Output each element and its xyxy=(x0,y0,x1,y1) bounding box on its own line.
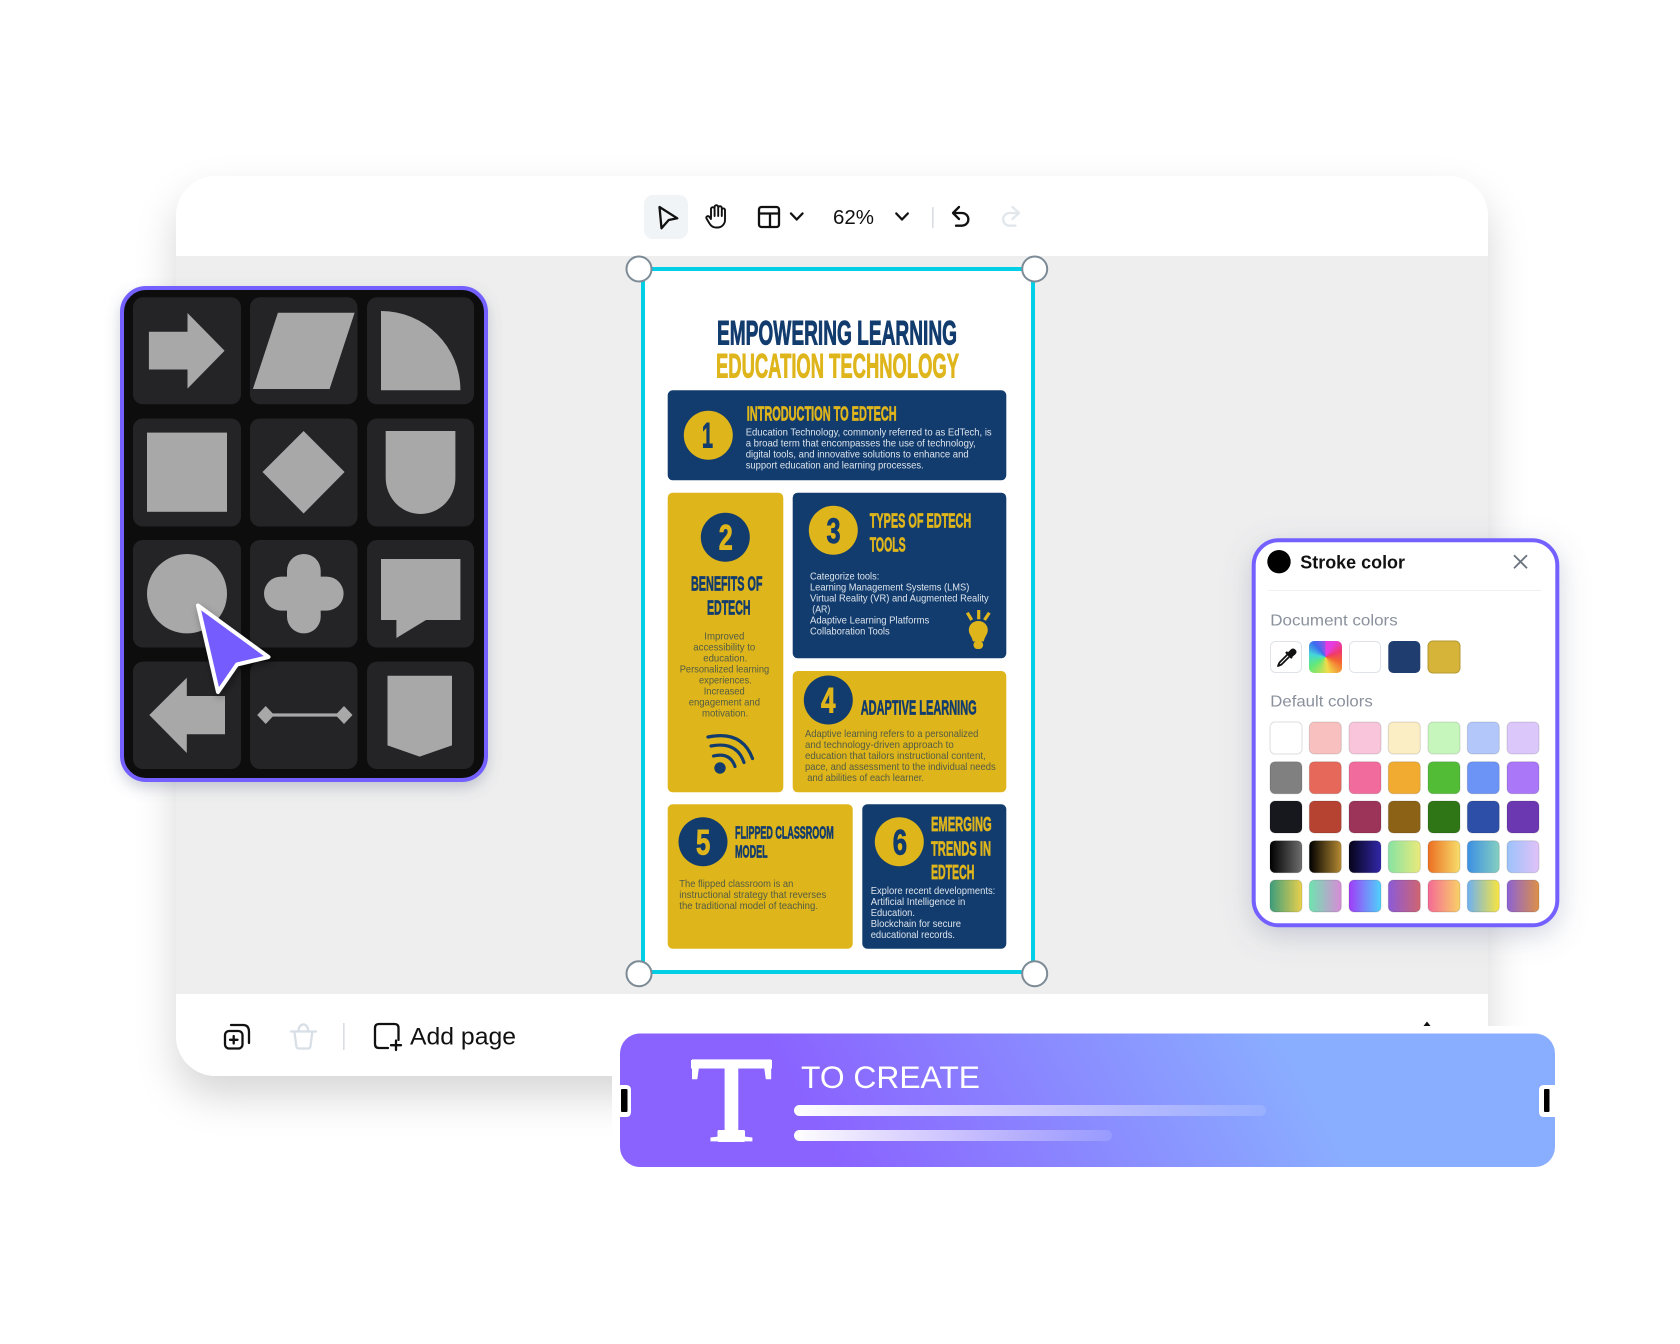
panel 2: benefits of edtech: BENEFITS OF xyxy=(691,573,762,596)
canvas area xyxy=(176,256,1488,994)
panel 6: emerging trends in edtech: Artificial Intelligence in xyxy=(871,897,965,908)
panel 5: flipped classroom model: The flipped classroom is an xyxy=(679,879,793,890)
panel 1: introduction to edtech: INTRODUCTION TO EDTECH xyxy=(747,402,897,425)
shape: speech bubble xyxy=(381,559,460,638)
panel 5: flipped classroom model: instructional strategy that reverses xyxy=(679,890,826,901)
panel 3: types of edtech tools: 3 xyxy=(826,511,840,551)
default color swatches xyxy=(1270,722,1539,912)
shape: square xyxy=(147,433,227,512)
panel 4: adaptive learning: pace, and assessment to the individual needs xyxy=(805,762,996,773)
panel 4: adaptive learning: ADAPTIVE LEARNING xyxy=(861,697,977,720)
panel 6: emerging trends in edtech: EMERGING xyxy=(931,813,992,836)
icon: hand tool xyxy=(706,205,725,228)
shape: left arrow xyxy=(149,678,225,753)
icon: select tool xyxy=(644,195,688,239)
document color swatches xyxy=(1270,641,1460,673)
panel 6: emerging trends in edtech: TRENDS IN xyxy=(931,837,991,860)
shape: circle xyxy=(147,554,227,633)
infographic page with selection frame xyxy=(626,256,1047,986)
panel 4: adaptive learning: and technology-driven approach to xyxy=(805,740,954,751)
icon: eyedropper xyxy=(1270,642,1302,672)
icon: purple cursor arrow xyxy=(198,606,268,692)
panel 6: emerging trends in edtech: Education. xyxy=(871,908,915,919)
panel 4: adaptive learning: Adaptive learning refers to a personalized xyxy=(805,729,978,740)
panel 2: benefits of edtech: EDTECH xyxy=(707,596,750,619)
banner: to create text tool xyxy=(620,1031,1555,1168)
panel 3: types of edtech tools: (AR) xyxy=(812,604,830,616)
button: add page: Add page xyxy=(410,1024,516,1050)
icon: light bulb xyxy=(967,610,989,649)
icon: close xyxy=(1514,555,1527,568)
panel 4: adaptive learning: education that tailors instructional content, xyxy=(805,751,986,762)
panel 3: types of edtech tools: TYPES OF EDTECH xyxy=(870,510,971,533)
panel 2: benefits of edtech: education. xyxy=(703,654,747,664)
panel 6: emerging trends in edtech: educational records. xyxy=(871,930,955,941)
panel 1: introduction to edtech: digital tools, and innovative solutions to enhance and xyxy=(746,450,969,460)
panel 1: introduction to edtech: 1 xyxy=(702,416,713,456)
panel 2: benefits of edtech: Personalized learning xyxy=(680,664,769,676)
panel 6: emerging trends in edtech: Blockchain for secure xyxy=(871,919,961,930)
placeholder text bar 1 xyxy=(794,1105,1266,1116)
shape: pocket xyxy=(388,676,452,757)
shape: line with diamond ends xyxy=(257,706,352,724)
panel 5: flipped classroom model xyxy=(668,804,853,949)
bottom toolbar xyxy=(225,1023,516,1050)
placeholder text bar 2 xyxy=(794,1130,1112,1141)
shape: rounded shield xyxy=(386,431,455,514)
panel 2: benefits of edtech: 2 xyxy=(719,518,733,558)
panel 1: introduction to edtech: a broad term that encompasses the use of technology, xyxy=(746,438,976,450)
panel 5: flipped classroom model: the traditional model of teaching. xyxy=(679,901,818,912)
panel 6: emerging trends in edtech: 6 xyxy=(893,822,907,862)
panel 5: flipped classroom model: FLIPPED CLASSROOM xyxy=(735,822,834,842)
icon: duplicate page xyxy=(225,1025,249,1048)
right resize handle xyxy=(1539,1085,1555,1117)
panel 1: introduction to edtech: Education Technology, commonly referred to as EdTech, is xyxy=(746,428,992,438)
zoom level xyxy=(833,207,908,229)
panel 4: adaptive learning: 4 xyxy=(821,681,836,721)
swatch: rainbow picker xyxy=(1309,641,1342,673)
swatch: current stroke xyxy=(1267,550,1291,573)
panel 1: introduction to edtech: support education and learning processes. xyxy=(746,460,924,472)
infographic title: EDUCATION TECHNOLOGY xyxy=(716,347,959,385)
icon: delete page xyxy=(291,1024,316,1048)
panel 4: adaptive learning: and abilities of each learner. xyxy=(807,773,924,784)
panel 3: types of edtech tools: Learning Management Systems (LMS) xyxy=(810,582,969,594)
panel 3: types of edtech tools: TOOLS xyxy=(870,533,906,556)
panel 5: flipped classroom model: MODEL xyxy=(735,841,768,861)
icon: layout menu xyxy=(759,207,802,227)
panel 2: benefits of edtech: engagement and xyxy=(689,698,760,708)
panel 3: types of edtech tools: Adaptive Learning Platforms xyxy=(810,616,929,626)
panel 4: adaptive learning xyxy=(793,671,1006,792)
icon: redo xyxy=(1003,207,1019,226)
panel 3: types of edtech tools: Collaboration Tools xyxy=(810,626,890,638)
panel 2: benefits of edtech: Improved xyxy=(704,632,744,642)
shape: quarter circle xyxy=(381,311,460,390)
selection handles xyxy=(626,256,1047,986)
icon: wifi signal xyxy=(708,736,752,774)
shape: diamond xyxy=(262,431,345,514)
shape: parallelogram xyxy=(253,313,355,389)
zoom level: 62% xyxy=(833,207,874,229)
panel 2: benefits of edtech: accessibility to xyxy=(693,642,755,654)
banner heading: TO CREATE xyxy=(801,1059,980,1095)
white backing behind text banner xyxy=(612,1026,1572,1186)
top toolbar xyxy=(644,195,1019,239)
panel 3: types of edtech tools: Virtual Reality (VR) and Augmented Reality xyxy=(810,594,989,604)
label: default colors: Default colors xyxy=(1270,694,1373,711)
panel 5: flipped classroom model: 5 xyxy=(696,822,710,862)
small caret xyxy=(1424,1022,1430,1026)
panel 2: benefits of edtech: Increased xyxy=(704,686,745,698)
panel heading: Stroke color xyxy=(1300,553,1405,573)
shape: right arrow xyxy=(149,313,225,389)
panel 3: types of edtech tools xyxy=(793,493,1006,658)
panel 6: emerging trends in edtech: EDTECH xyxy=(931,861,974,884)
panel 3: types of edtech tools: Categorize tools: xyxy=(810,572,879,582)
panel 2: benefits of edtech: motivation. xyxy=(702,708,748,720)
shape: cross xyxy=(264,554,344,633)
panel 6: emerging trends in edtech: Explore recent developments: xyxy=(871,886,995,897)
icon: text tool T: T xyxy=(690,1031,773,1168)
panel 6: emerging trends in edtech xyxy=(862,804,1006,949)
infographic title: EMPOWERING LEARNING xyxy=(717,314,957,352)
panel: stroke color picker xyxy=(1254,540,1557,925)
panel 2: benefits of edtech: experiences. xyxy=(699,676,752,686)
panel 2: benefits of edtech xyxy=(668,493,783,792)
infographic title xyxy=(716,314,959,385)
left resize handle xyxy=(620,1085,631,1117)
panel: shape library xyxy=(122,288,486,780)
editor window xyxy=(176,176,1488,1076)
label: document colors: Document colors xyxy=(1270,612,1398,629)
panel 1: introduction to edtech xyxy=(668,390,1006,480)
icon: undo xyxy=(953,207,968,226)
